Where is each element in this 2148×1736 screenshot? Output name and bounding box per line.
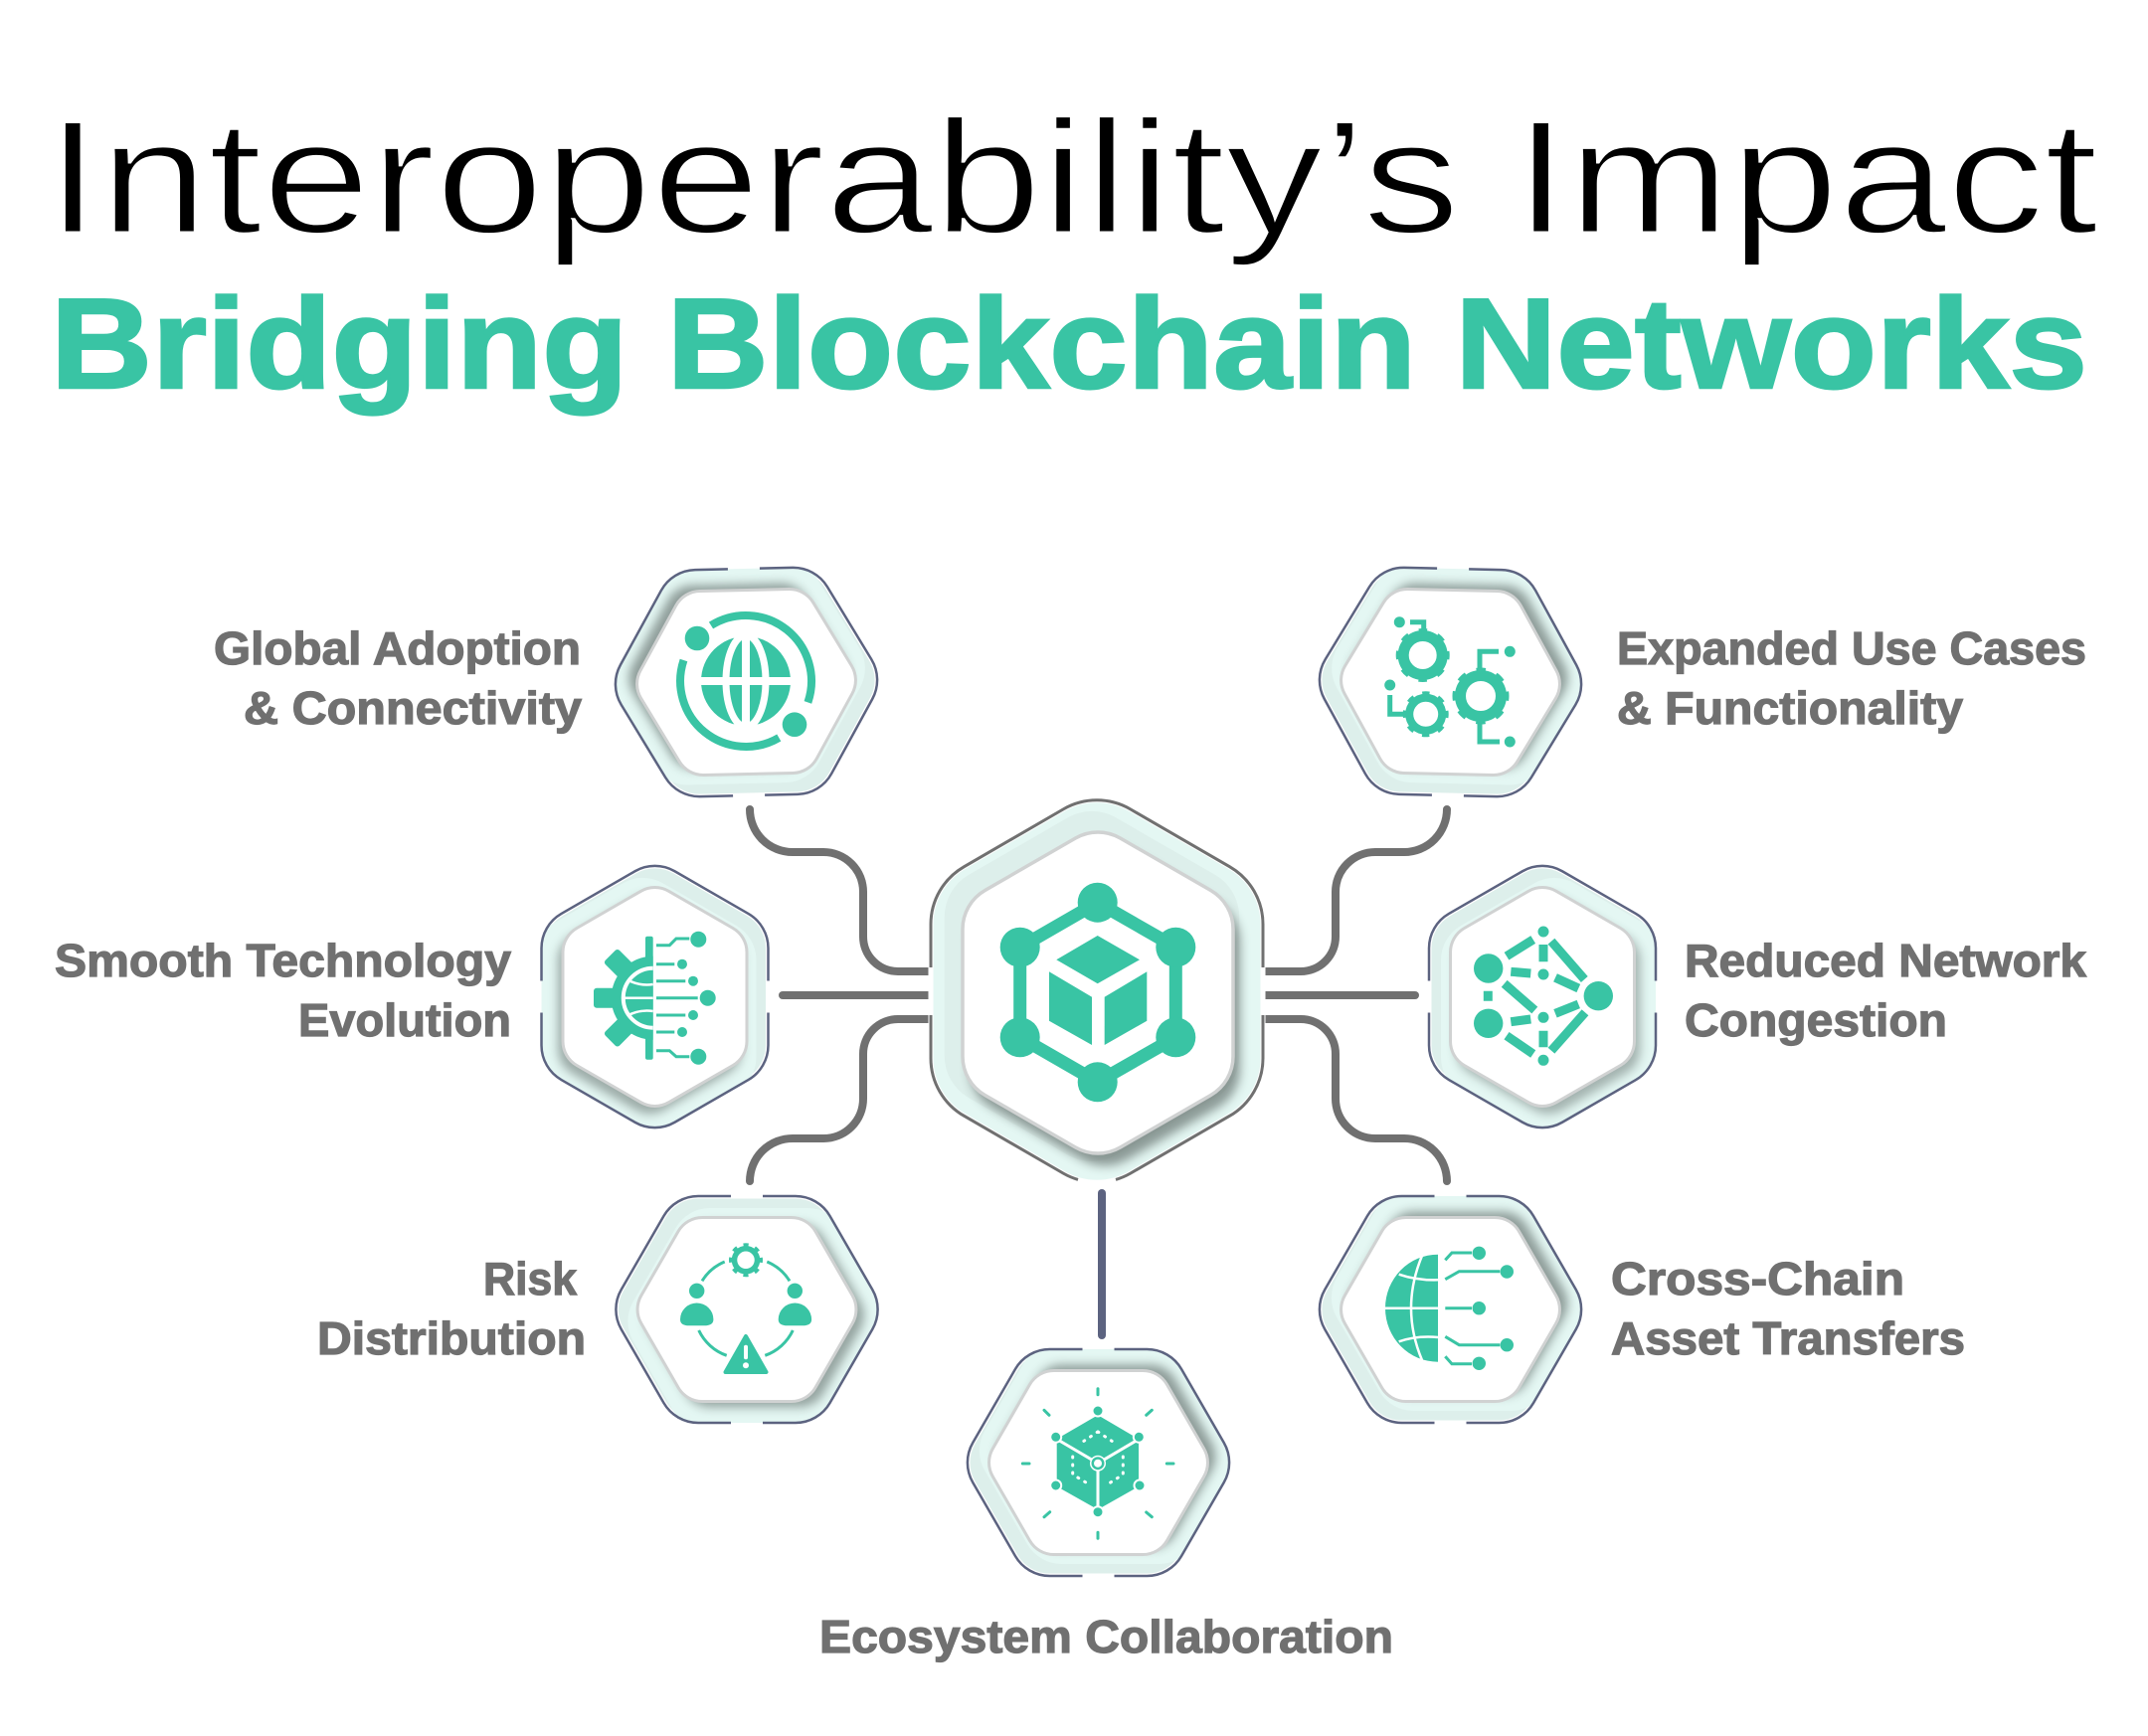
central hexagon	[931, 800, 1263, 1182]
label: risk distribution: Distribution	[317, 1312, 586, 1364]
hexagon: reduced network congestion	[1429, 866, 1668, 1139]
label: expanded use cases: & Functionality	[1617, 682, 1963, 734]
label: ecosystem collaboration: Ecosystem Collaboration	[819, 1611, 1393, 1662]
hexagon: expanded use cases	[1319, 567, 1583, 797]
icon: gears	[1384, 616, 1516, 748]
subtitle: Bridging Blockchain Networks	[51, 272, 2087, 416]
hexagon: smooth technology evolution	[529, 866, 768, 1139]
label: global adoption	[214, 622, 582, 734]
icon: half globe with circuit lines	[1385, 1247, 1514, 1370]
hexagon: ecosystem collaboration	[968, 1337, 1241, 1576]
label: reduced network congestion	[1685, 935, 2086, 1046]
label: global adoption: Global Adoption	[214, 622, 581, 674]
icon: central cube network	[1000, 883, 1195, 1102]
hexagon: cross-chain asset transfers	[1320, 1184, 1593, 1423]
label: risk distribution: Risk	[483, 1253, 577, 1304]
connector lines	[750, 809, 1447, 1335]
icon: network nodes	[1474, 927, 1613, 1066]
label: smooth technology evolution	[55, 935, 511, 1046]
label: expanded use cases: Expanded Use Cases	[1617, 622, 2086, 674]
label: smooth technology evolution: Smooth Technology	[55, 935, 511, 986]
label: global adoption: & Connectivity	[244, 682, 582, 734]
label: expanded use cases	[1617, 622, 2086, 734]
hexagon: global adoption	[615, 567, 879, 797]
icon: ecosystem cube	[1022, 1389, 1173, 1538]
icon: globe with orbit	[680, 615, 811, 747]
label: reduced network congestion: Congestion	[1685, 994, 1947, 1046]
title: Interoperability’s Impact	[46, 87, 2098, 267]
label: cross-chain asset transfers	[1611, 1253, 1965, 1364]
label: smooth technology evolution: Evolution	[298, 994, 511, 1046]
icon: half gear with circuit lines	[594, 932, 716, 1065]
icon: risk circle with people and warning	[680, 1245, 811, 1372]
label: cross-chain asset transfers: Cross-Chain	[1611, 1253, 1904, 1304]
label: risk distribution	[317, 1253, 586, 1364]
label: cross-chain asset transfers: Asset Transfers	[1611, 1312, 1965, 1364]
hexagon: risk distribution	[616, 1196, 890, 1435]
label: reduced network congestion: Reduced Network	[1685, 935, 2086, 986]
